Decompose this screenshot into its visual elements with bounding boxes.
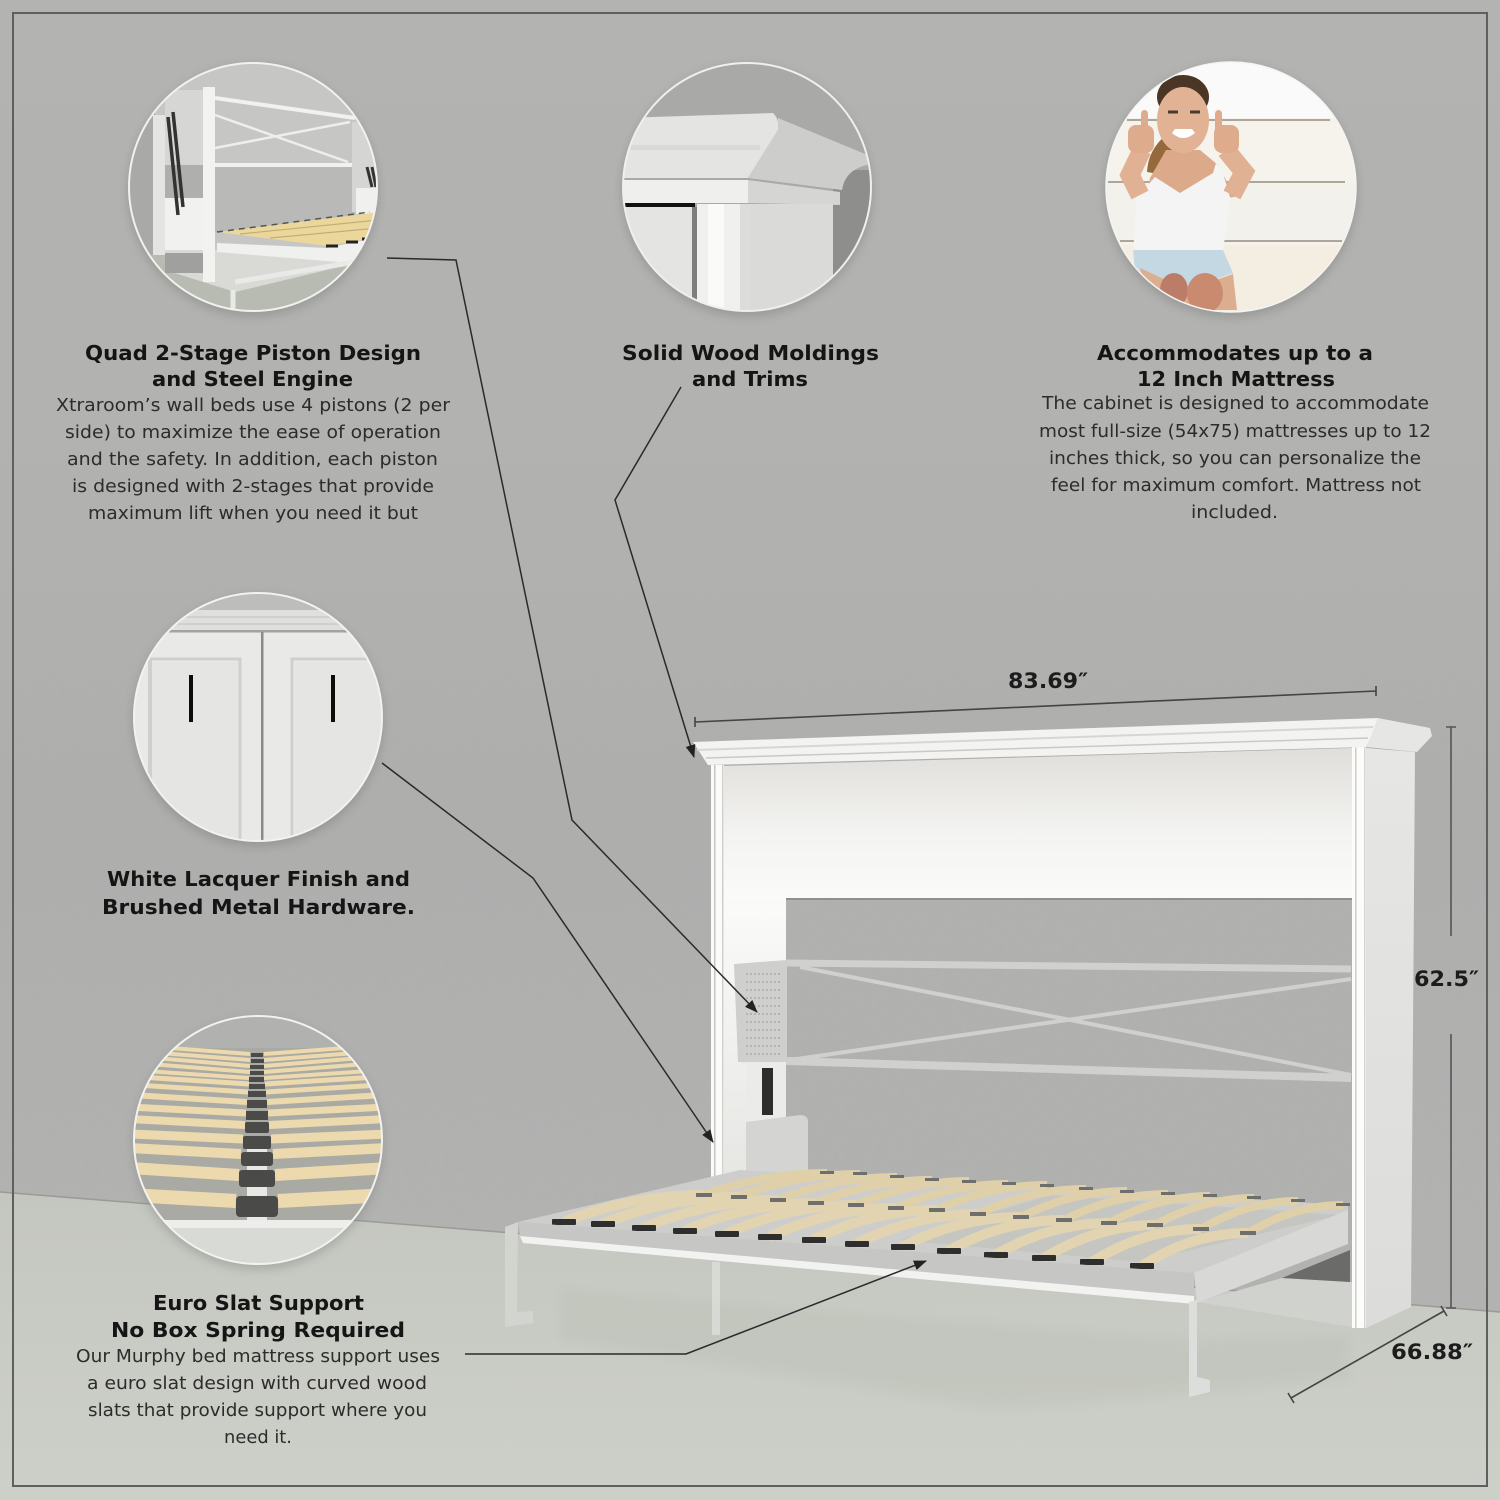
text block: piston design: is designed with 2-stages that provide bbox=[72, 477, 434, 497]
side rail bbox=[1194, 1210, 1348, 1303]
text block: mattress: The cabinet is designed to accommodate bbox=[1041, 394, 1429, 414]
slat end caps front bbox=[552, 1219, 1154, 1269]
slat middle and rear caps bbox=[696, 1171, 1350, 1235]
dimension: height: 62.5″ bbox=[1414, 967, 1479, 991]
back slats bbox=[704, 1173, 1343, 1233]
rear left leg bbox=[712, 1262, 720, 1335]
text block: mouldings: Solid Wood Moldings bbox=[622, 341, 879, 365]
lower bracket bbox=[746, 1115, 808, 1180]
deck shadow panel bbox=[900, 1195, 1340, 1262]
circle: door finish detail bbox=[130, 590, 395, 846]
front right leg bbox=[1189, 1300, 1210, 1397]
text block: finish: Brushed Metal Hardware. bbox=[102, 895, 415, 919]
text block: mattress: inches thick, so you can personalize the bbox=[1049, 449, 1421, 469]
cabinet side panel bbox=[1366, 748, 1415, 1328]
text block: euro slat: Our Murphy bed mattress support uses bbox=[76, 1347, 440, 1367]
left interior wall bbox=[723, 895, 787, 1195]
dark gap under bed bbox=[1282, 1250, 1350, 1282]
text block: mouldings: and Trims bbox=[692, 367, 808, 391]
text block: euro slat: No Box Spring Required bbox=[111, 1318, 405, 1342]
murphy bed illustration bbox=[505, 718, 1432, 1397]
circle: mattress woman photo bbox=[1100, 60, 1365, 320]
circle: piston detail bbox=[125, 60, 385, 320]
callout line: pistons bbox=[387, 258, 757, 1012]
text block: mattress bbox=[1039, 341, 1431, 523]
perforated side bracket bbox=[734, 960, 787, 1065]
text block: piston design: side) to maximize the ease of operation bbox=[65, 423, 441, 443]
text block: euro slat: slats that provide support where you bbox=[88, 1401, 427, 1421]
piston bbox=[746, 1062, 786, 1122]
text block: piston design bbox=[56, 341, 451, 524]
dimension: depth: 66.88″ bbox=[1391, 1340, 1473, 1364]
text block: euro slat: a euro slat design with curved wood bbox=[87, 1374, 427, 1394]
dimension: depth bbox=[1288, 1306, 1473, 1403]
circle: euro slat detail bbox=[130, 1010, 390, 1270]
crown moulding side bbox=[1366, 718, 1432, 752]
text block: euro slat: Euro Slat Support bbox=[153, 1291, 364, 1315]
text block: piston design: and Steel Engine bbox=[152, 367, 353, 391]
callout line: mouldings bbox=[615, 387, 694, 757]
dimension: width: 83.69″ bbox=[1008, 669, 1088, 693]
text block: mattress: feel for maximum comfort. Mattress not bbox=[1051, 476, 1421, 496]
front slats bbox=[564, 1195, 1248, 1266]
text block: mattress: most full-size (54x75) mattresses up to 12 bbox=[1039, 422, 1431, 442]
headboard bars bbox=[786, 963, 1351, 1078]
text block: euro slat: need it. bbox=[224, 1428, 292, 1448]
text block: finish bbox=[102, 867, 415, 919]
crown moulding front bbox=[693, 718, 1378, 765]
base plinth bbox=[1197, 1278, 1352, 1327]
text block: mattress: Accommodates up to a bbox=[1097, 341, 1373, 365]
recessed back wall bbox=[786, 898, 1352, 1239]
cabinet interior upper panel bbox=[723, 748, 1352, 900]
front rail bbox=[518, 1222, 1194, 1304]
text block: piston design: maximum lift when you need it but bbox=[88, 504, 418, 524]
callout line: finish bbox=[382, 763, 713, 1142]
text block: mouldings bbox=[622, 341, 879, 391]
bed platform deck bbox=[518, 1170, 1348, 1275]
right pilaster bbox=[1352, 747, 1366, 1328]
left pilaster bbox=[711, 765, 724, 1215]
text block: euro slat bbox=[76, 1291, 440, 1448]
text block: finish: White Lacquer Finish and bbox=[107, 867, 410, 891]
front left leg bbox=[505, 1222, 533, 1327]
text block: piston design: Xtraroom’s wall beds use 4 pistons (2 per bbox=[56, 396, 451, 416]
text block: piston design: Quad 2-Stage Piston Design bbox=[85, 341, 421, 365]
dimension: width bbox=[695, 669, 1376, 727]
text block: mattress: 12 Inch Mattress bbox=[1137, 367, 1335, 391]
circle: moulding detail bbox=[620, 60, 883, 322]
callout line: slats bbox=[465, 1261, 926, 1354]
text block: piston design: and the safety. In addition, each piston bbox=[67, 450, 438, 470]
floor bbox=[0, 1192, 1500, 1500]
text block: mattress: included. bbox=[1191, 503, 1278, 523]
dimension: height bbox=[1414, 727, 1479, 1308]
